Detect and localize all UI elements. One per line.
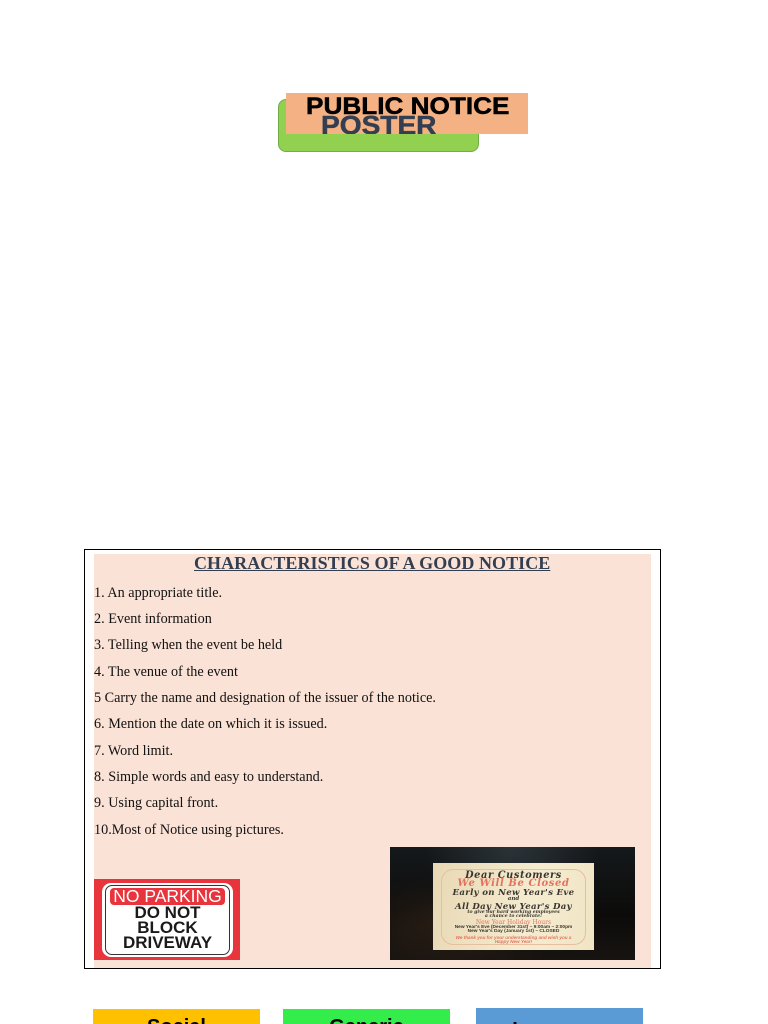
orange title banner xyxy=(286,93,528,134)
notice text: All Day New Year's Day xyxy=(455,902,572,912)
sign text xyxy=(123,903,212,952)
box: social xyxy=(93,1009,260,1024)
list of characteristics: 1. An appropriate title. xyxy=(94,585,222,601)
list of characteristics: 9. Using capital front. xyxy=(94,795,218,811)
notice text: We Will Be Closed xyxy=(457,878,570,889)
notice card xyxy=(433,863,594,950)
panel background xyxy=(94,554,651,968)
list of characteristics: 5 Carry the name and designation of the issuer of the notice. xyxy=(94,690,436,706)
list of characteristics: 3. Telling when the event be held xyxy=(94,637,282,653)
photo of closure notice xyxy=(390,847,635,960)
sign text: BLOCK xyxy=(137,918,198,937)
list of characteristics: 7. Word limit. xyxy=(94,743,173,759)
notice text: and xyxy=(508,896,519,902)
notice text: We thank you for your understanding and wish you a xyxy=(456,935,571,940)
heading: public notice: PUBLIC NOTICE xyxy=(306,93,509,120)
notice text: to give our hard working employees xyxy=(467,910,560,915)
list of characteristics xyxy=(94,585,436,838)
panel: characteristics of a good notice xyxy=(84,549,661,969)
sign text: DO NOT xyxy=(134,903,201,922)
notice text xyxy=(452,870,574,944)
notice text: Early on New Year's Eve xyxy=(453,888,574,898)
list of characteristics: 8. Simple words and easy to understand. xyxy=(94,769,323,785)
sign white plate xyxy=(102,883,233,957)
green poster shape xyxy=(278,99,479,152)
sign red label: NO PARKING xyxy=(113,886,222,906)
no parking sign xyxy=(94,879,240,960)
notice text: New Year's Eve (December 31st) – 9:00am – 2:00pm xyxy=(455,925,572,930)
list of characteristics: 4. The venue of the event xyxy=(94,664,238,680)
list of characteristics: 2. Event information xyxy=(94,611,212,627)
notice inner frame xyxy=(441,869,586,945)
sign black inner frame xyxy=(105,885,230,955)
box: language xyxy=(476,1008,643,1024)
notice text: Dear Customers xyxy=(465,870,562,881)
list of characteristics: 10.Most of Notice using pictures. xyxy=(94,822,284,838)
panel heading: CHARACTERISTICS OF A GOOD NOTICE xyxy=(194,553,550,573)
box: generic xyxy=(283,1009,450,1024)
list of characteristics: 6. Mention the date on which it is issued. xyxy=(94,716,327,732)
notice text: New Year Holiday Hours xyxy=(476,919,551,926)
title block xyxy=(278,93,528,152)
notice text: a chance to celebrate! xyxy=(485,914,542,919)
notice text: Happy New Year! xyxy=(495,939,532,944)
notice text: New Year's Day (January 1st) – CLOSED xyxy=(468,929,559,934)
sign text: DRIVEWAY xyxy=(123,933,212,952)
